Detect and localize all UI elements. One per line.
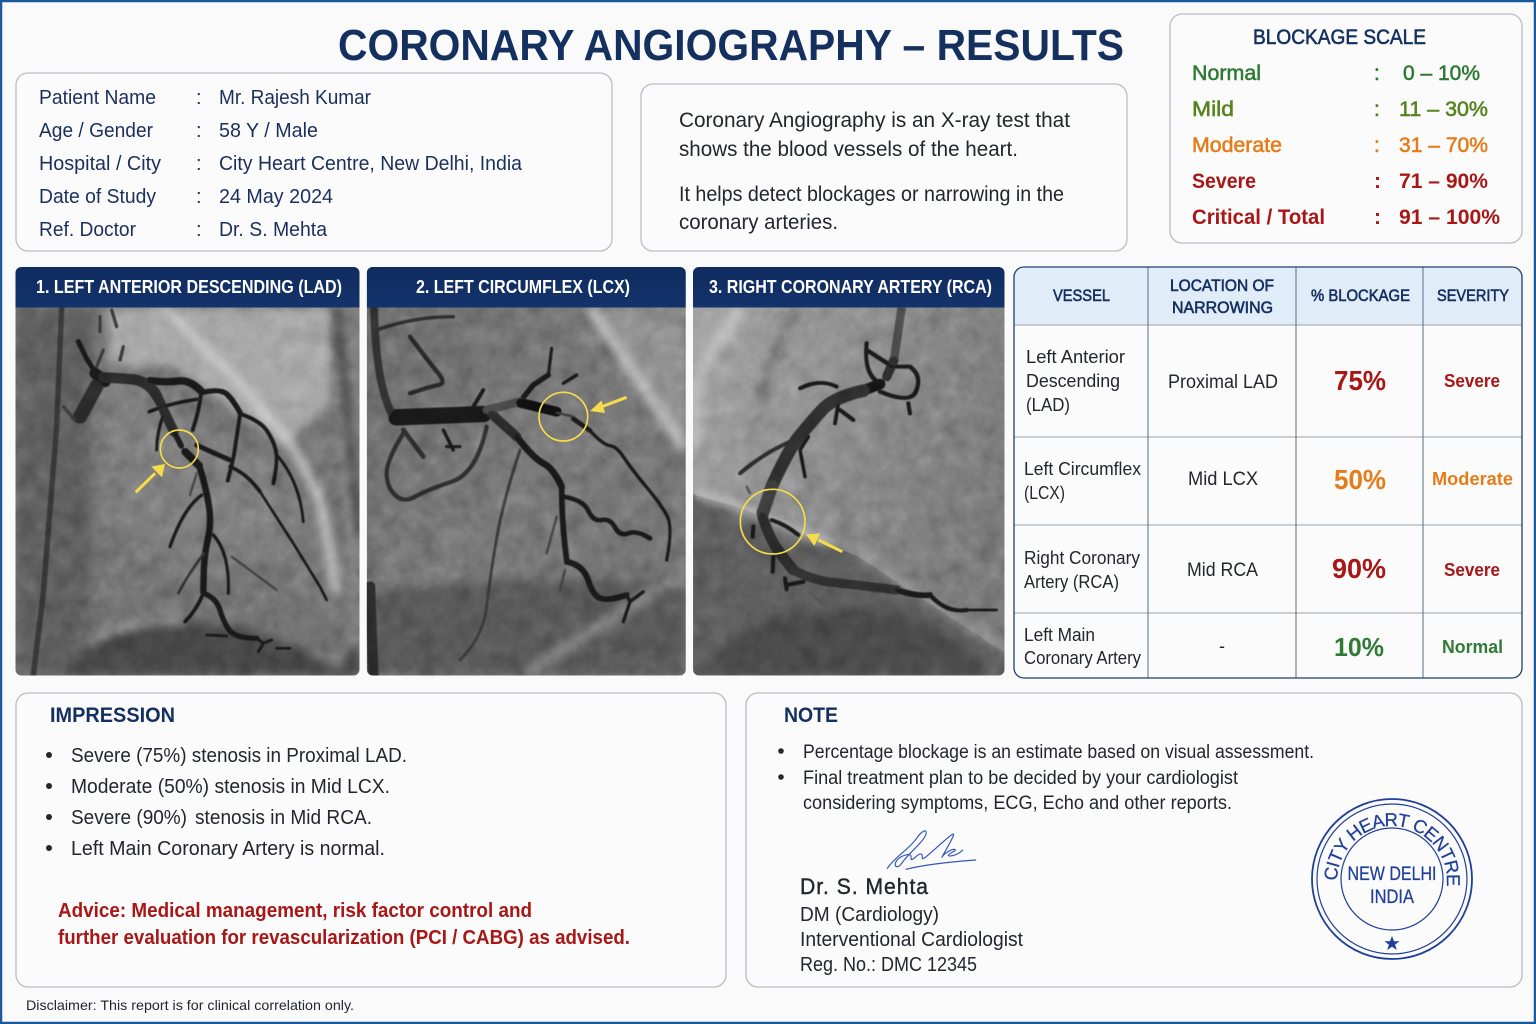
panel: LCX angiogram xyxy=(367,267,686,676)
panel: RCA angiogram xyxy=(693,267,1004,676)
disclaimer: Disclaimer: This report is for clinical correlation only. xyxy=(26,997,354,1013)
scale heading: BLOCKAGE SCALE xyxy=(1253,26,1426,49)
impression heading: IMPRESSION xyxy=(50,704,175,727)
table row: LAD: Severe xyxy=(1444,371,1500,391)
doctor details: DM (Cardiology) xyxy=(800,904,939,926)
hospital and city row: Hospital / City xyxy=(39,153,161,175)
mild range: Mild xyxy=(1192,98,1234,121)
age and gender row: : xyxy=(196,120,202,142)
LCX panel header: 2. LEFT CIRCUMFLEX (LCX) xyxy=(416,277,630,297)
table row: LAD: Left Anterior xyxy=(1026,347,1125,367)
note bullet list xyxy=(778,742,1314,814)
table row: left main: - xyxy=(1219,636,1225,656)
critical range xyxy=(1192,206,1500,229)
critical range: : xyxy=(1374,206,1381,229)
table row: RCA: Mid RCA xyxy=(1187,560,1258,581)
description text: It helps detect blockages or narrowing in the xyxy=(679,183,1064,206)
icon: hospital stamp: NEW DELHI xyxy=(1348,864,1436,885)
description text: coronary arteries. xyxy=(679,211,838,234)
normal range: : xyxy=(1374,62,1380,85)
panel: impression xyxy=(16,693,726,987)
panel: blockage scale xyxy=(1170,14,1522,243)
LAD panel header: 1. LEFT ANTERIOR DESCENDING (LAD) xyxy=(36,277,342,297)
table row: RCA xyxy=(1024,548,1500,592)
table row: left main: Normal xyxy=(1442,637,1503,657)
LAD stenosis circle and arrow xyxy=(136,430,198,492)
referring doctor row: Ref. Doctor xyxy=(39,219,136,241)
moderate range: 31 – 70% xyxy=(1399,134,1488,157)
patient name row: Patient Name xyxy=(39,87,156,109)
table row: LAD xyxy=(1026,347,1500,415)
referring doctor row xyxy=(39,219,328,241)
table header row: VESSEL xyxy=(1053,287,1110,305)
panel: note and signature xyxy=(745,692,1523,988)
advice text xyxy=(58,900,630,949)
table row: left main xyxy=(1024,625,1503,668)
icon: hospital stamp: INDIA xyxy=(1370,887,1414,908)
age and gender row: 58 Y / Male xyxy=(219,120,318,142)
severe range: 71 – 90% xyxy=(1399,170,1488,193)
impression bullet list: Left Main Coronary Artery is normal. xyxy=(71,838,385,860)
RCA panel header xyxy=(693,267,1004,308)
mild range xyxy=(1192,98,1488,121)
table row: left main: 10% xyxy=(1334,632,1384,662)
panel: test description xyxy=(641,84,1127,251)
doctor details xyxy=(800,874,1023,976)
hospital and city row: : xyxy=(196,153,202,175)
moderate range: Moderate xyxy=(1192,134,1282,157)
severe range xyxy=(1192,170,1488,193)
moderate range xyxy=(1192,134,1488,157)
doctor details: Dr. S. Mehta xyxy=(800,874,929,899)
note heading: NOTE xyxy=(784,704,838,727)
table row: LCX: Left Circumflex xyxy=(1024,459,1141,479)
note bullet list: Percentage blockage is an estimate based on visual assessment. xyxy=(803,742,1314,763)
table header row: SEVERITY xyxy=(1437,287,1509,305)
table row: RCA: Artery (RCA) xyxy=(1024,572,1119,592)
hospital and city row xyxy=(39,153,523,175)
patient name row xyxy=(39,87,371,109)
note bullet list: considering symptoms, ECG, Echo and other reports. xyxy=(803,793,1232,814)
age and gender row xyxy=(39,120,318,142)
date of study row xyxy=(39,186,333,208)
referring doctor row: : xyxy=(196,219,202,241)
date of study row: 24 May 2024 xyxy=(219,186,333,208)
doctor details: Interventional Cardiologist xyxy=(800,929,1023,951)
LCX panel header xyxy=(367,267,686,308)
icon: doctor signature xyxy=(887,831,976,869)
normal range: Normal xyxy=(1192,62,1261,85)
note bullet list: Final treatment plan to be decided by your cardiologist xyxy=(803,768,1239,789)
table header row: NARROWING xyxy=(1172,299,1273,317)
mild range: : xyxy=(1374,98,1380,121)
severe range: : xyxy=(1374,170,1381,193)
impression bullet list: stenosis in Mid RCA. xyxy=(195,807,372,829)
table row: RCA: 90% xyxy=(1332,553,1386,584)
table row: LCX: Mid LCX xyxy=(1188,469,1258,490)
advice text: Advice: Medical management, risk factor control and xyxy=(58,900,532,922)
critical range: 91 – 100% xyxy=(1399,206,1500,229)
table row: LCX xyxy=(1024,459,1513,503)
date of study row: Date of Study xyxy=(39,186,156,208)
icon: hospital stamp xyxy=(1311,798,1473,960)
panel: LAD angiogram xyxy=(16,267,360,676)
table row: RCA: Severe xyxy=(1444,560,1500,580)
table row: LCX: (LCX) xyxy=(1024,483,1065,503)
LAD panel header xyxy=(16,267,360,308)
mild range: 11 – 30% xyxy=(1399,98,1488,121)
table row: LAD: Descending xyxy=(1026,371,1120,391)
impression bullet list: Moderate (50%) stenosis in Mid LCX. xyxy=(71,776,390,798)
patient name row: Mr. Rajesh Kumar xyxy=(219,87,371,109)
RCA panel header: 3. RIGHT CORONARY ARTERY (RCA) xyxy=(709,277,992,297)
normal range xyxy=(1192,62,1480,85)
doctor details: Reg. No.: DMC 12345 xyxy=(800,954,977,976)
table header row: LOCATION OF xyxy=(1170,277,1274,295)
impression bullet list: Severe (90%) xyxy=(71,807,187,829)
table row: LAD: Proximal LAD xyxy=(1168,372,1278,393)
icon: hospital stamp: CITY HEART CENTRE xyxy=(1324,813,1460,886)
table header row xyxy=(1053,277,1509,317)
age and gender row: Age / Gender xyxy=(39,120,153,142)
table row: left main: Coronary Artery xyxy=(1024,648,1141,668)
table row: LAD: (LAD) xyxy=(1026,395,1070,415)
impression bullet list xyxy=(46,745,407,860)
table row: LAD: 75% xyxy=(1334,365,1386,396)
referring doctor row: Dr. S. Mehta xyxy=(219,219,328,241)
moderate range: : xyxy=(1374,134,1380,157)
LCX stenosis circle and arrow xyxy=(539,392,627,441)
table row: LCX: 50% xyxy=(1334,464,1386,495)
severe range: Severe xyxy=(1192,170,1256,193)
RCA stenosis circle and arrow xyxy=(740,489,842,554)
date of study row: : xyxy=(196,186,202,208)
panel: patient details xyxy=(16,73,612,251)
normal range: 0 – 10% xyxy=(1403,62,1480,85)
table: vessel findings xyxy=(1014,267,1522,678)
table header row: % BLOCKAGE xyxy=(1311,287,1410,305)
impression bullet list: Severe (75%) stenosis in Proximal LAD. xyxy=(71,745,407,767)
description text: shows the blood vessels of the heart. xyxy=(679,138,1018,161)
hospital and city row: City Heart Centre, New Delhi, India xyxy=(219,153,523,175)
description text: Coronary Angiography is an X-ray test that xyxy=(679,109,1070,132)
title: CORONARY ANGIOGRAPHY – RESULTS xyxy=(338,21,1124,70)
advice text: further evaluation for revascularization (PCI / CABG) as advised. xyxy=(58,927,630,949)
critical range: Critical / Total xyxy=(1192,206,1325,229)
table row: RCA: Right Coronary xyxy=(1024,548,1140,568)
description text xyxy=(679,109,1070,234)
patient name row: : xyxy=(196,87,202,109)
table row: left main: Left Main xyxy=(1024,625,1095,645)
table row: LCX: Moderate xyxy=(1432,469,1513,489)
